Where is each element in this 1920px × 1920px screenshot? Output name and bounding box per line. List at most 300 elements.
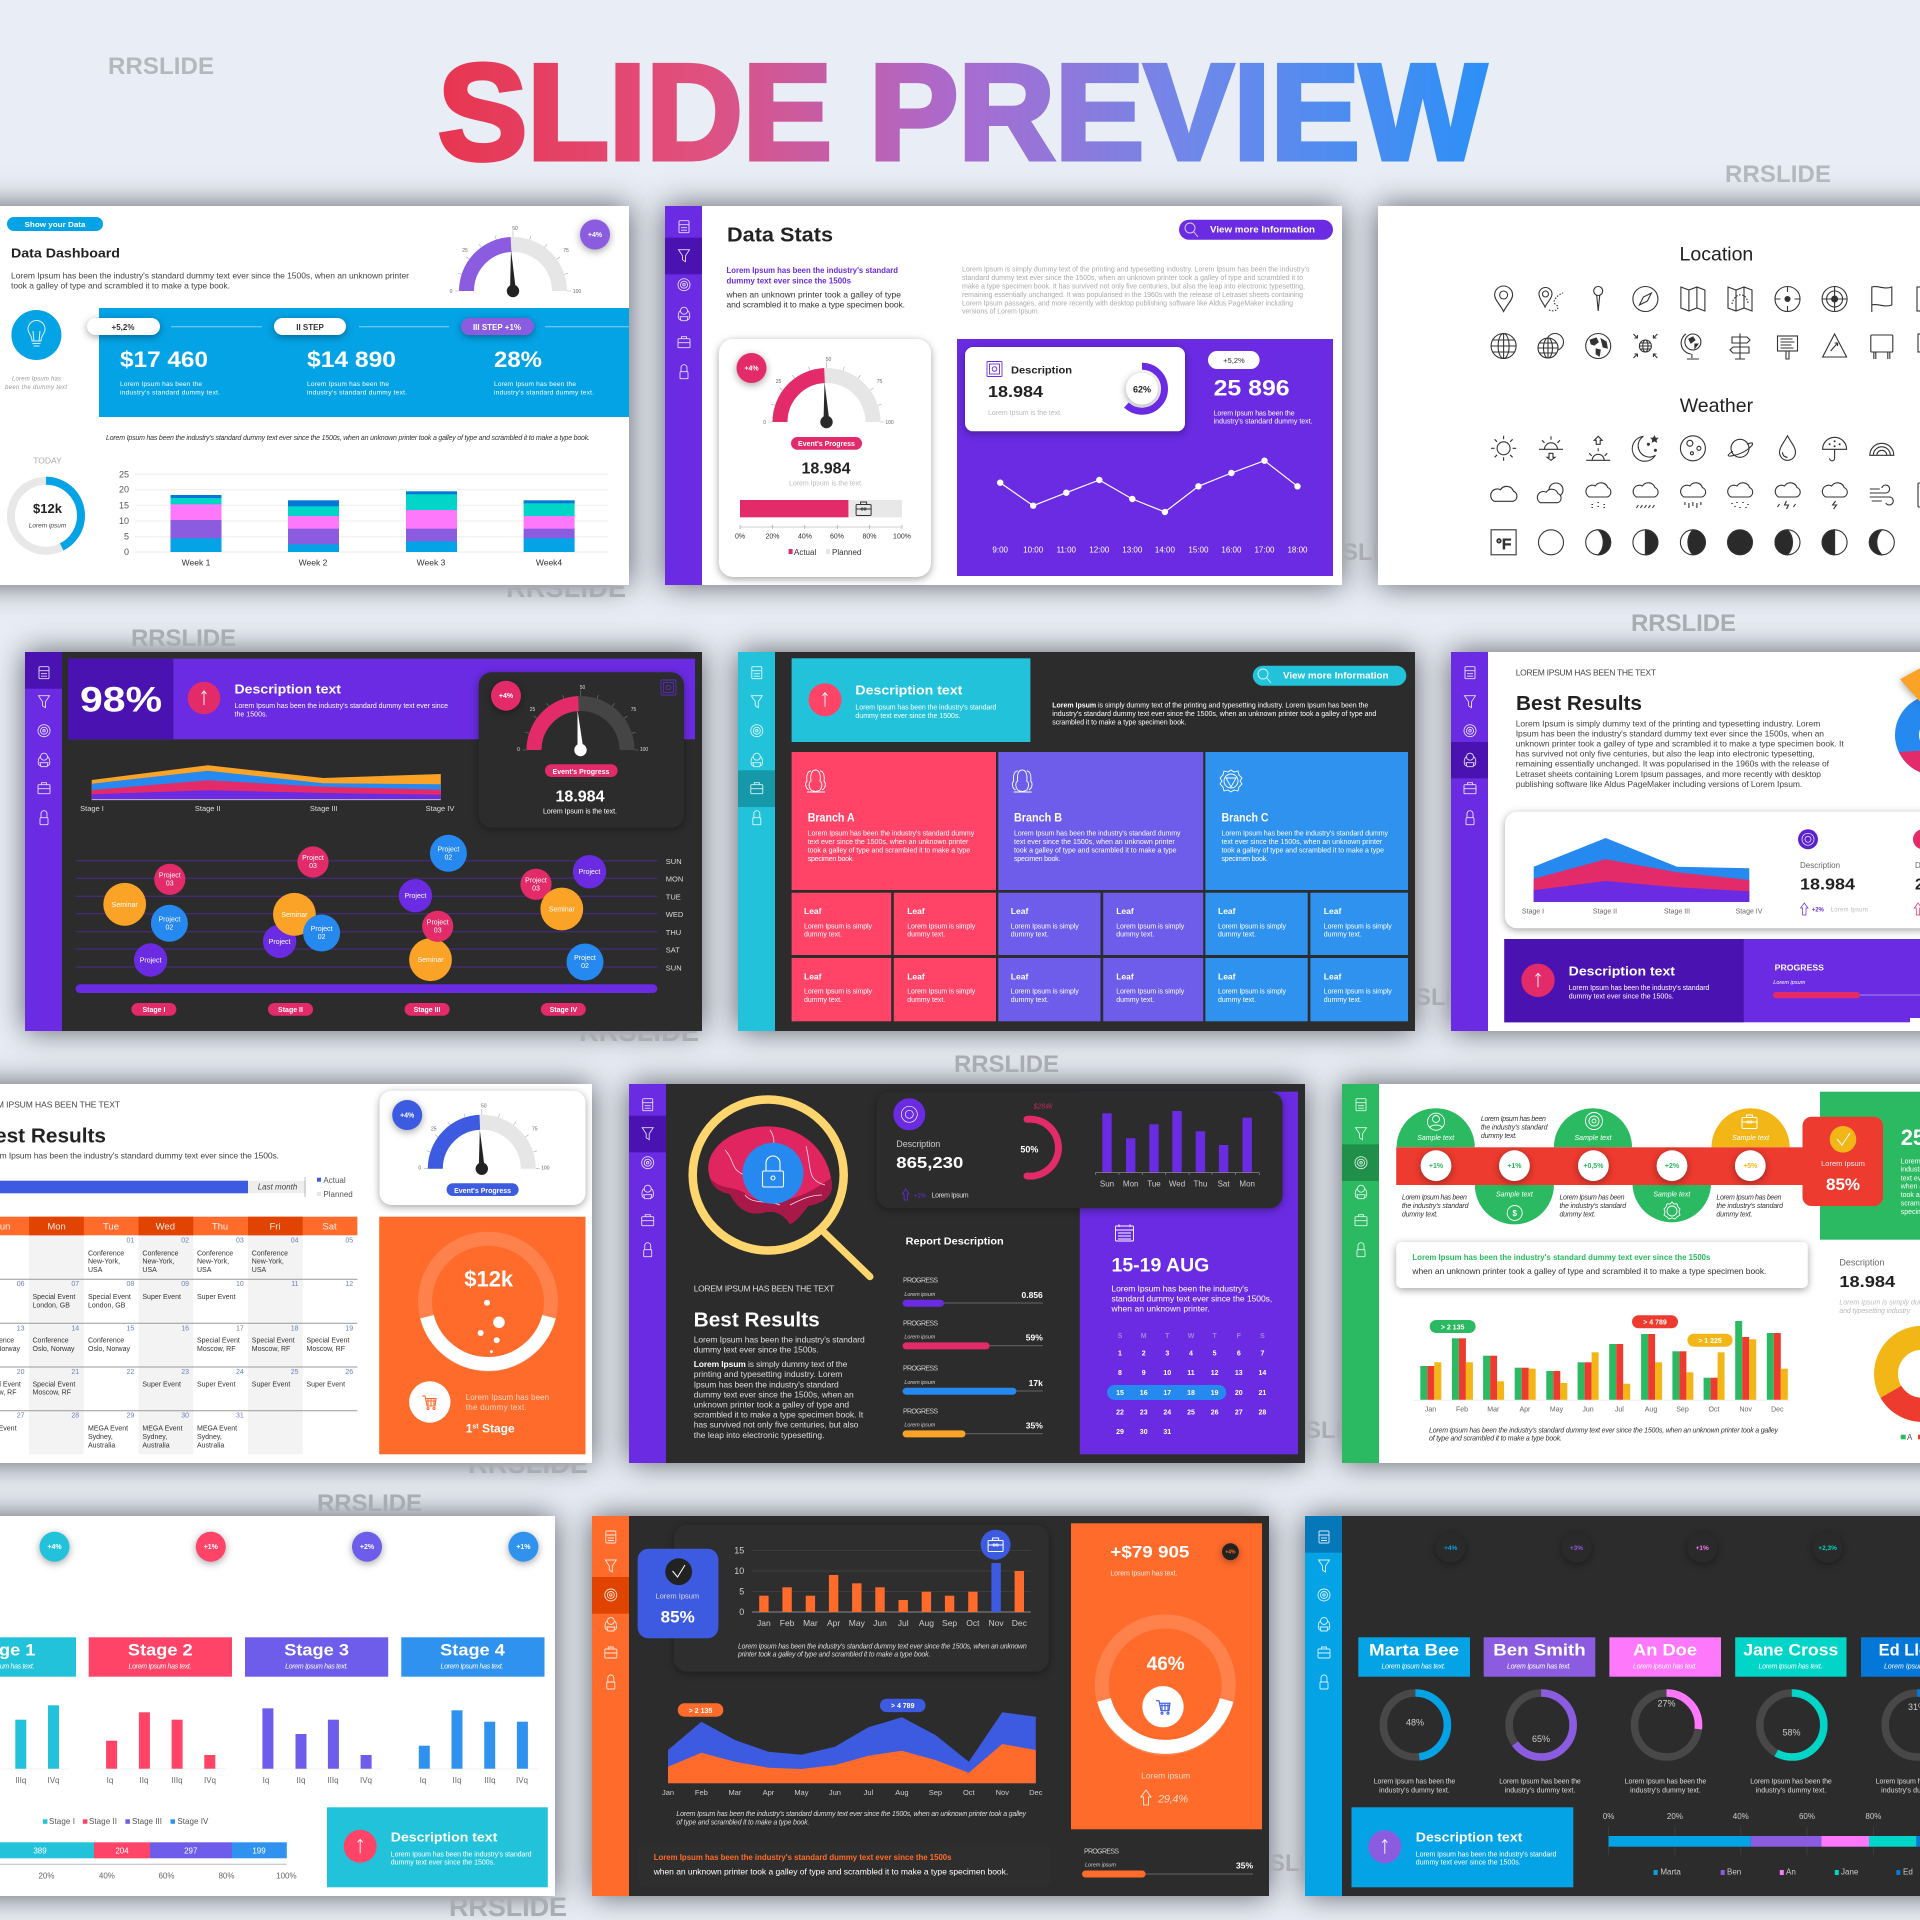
area chart: Stage II: [195, 804, 221, 813]
chart card: Stage III: [1664, 908, 1690, 915]
calendar: Sydney,: [197, 1434, 222, 1441]
quarterly bars: IVq: [360, 1776, 372, 1785]
gauge card: 100: [541, 1166, 550, 1172]
stacked bar: 20%: [38, 1872, 55, 1881]
calendar: Sat: [322, 1221, 337, 1232]
monthly bar chart: Apr: [1519, 1406, 1531, 1413]
stacked bar chart: Week4: [536, 557, 562, 567]
leaf blocks: Leaf: [1324, 906, 1341, 916]
sidebar: [592, 1516, 629, 1896]
date calendar: 22: [1116, 1409, 1124, 1416]
leaf blocks: Leaf: [1324, 971, 1341, 981]
progress bar: Planned: [323, 1190, 353, 1199]
report progress: 59%: [1026, 1333, 1043, 1343]
stage pills: [76, 984, 657, 1016]
line chart: 10:00: [1023, 545, 1044, 554]
weekly bars: Sat: [1218, 1180, 1230, 1189]
calendar: Super Event: [142, 1381, 181, 1388]
stage pills: Stage IV: [550, 1007, 578, 1014]
date calendar: 4: [1189, 1351, 1193, 1358]
header band: [68, 659, 695, 739]
bubble timeline: Project: [311, 926, 333, 933]
watermarks: SLIDE: [1415, 984, 1486, 1011]
watermarks: RRSLIDE: [579, 1017, 699, 1047]
process band: dummy text.: [1481, 1133, 1517, 1140]
gray paragraph: Lorem Ipsum is simply dummy text of the printing and typesetting industry. Lorem Ipsum has been the industry's: [962, 267, 1310, 274]
chart card: Stage IV: [1736, 908, 1763, 915]
gauge card: Event's Progress: [553, 769, 610, 776]
quarterly bars: Iq: [420, 1776, 426, 1785]
percent bubbles: +1%: [204, 1544, 219, 1551]
best results text: dummy text ever since the 1500s.: [694, 1345, 819, 1355]
stage headers: Stage 3: [284, 1641, 349, 1660]
paragraph: scrambled it to make a type specimen book.: [1052, 719, 1186, 726]
weekly bars: [1095, 1111, 1259, 1189]
calendar: Conference: [88, 1338, 124, 1345]
description card: 18.984: [988, 384, 1043, 401]
stage pills: Stage II: [278, 1007, 303, 1014]
legend: Stage I: [49, 1817, 75, 1826]
leaf blocks: Leaf: [907, 971, 925, 981]
top chart card: Jul: [898, 1618, 909, 1628]
gauge card: 0: [418, 1166, 421, 1172]
branch blocks: Branch C: [1222, 813, 1268, 825]
process band: dummy text.: [1716, 1211, 1752, 1218]
name headers: Lorem Ipsum has text.: [1758, 1663, 1823, 1670]
ring labels: 65%: [1532, 1734, 1550, 1744]
purple block: [877, 1092, 1298, 1454]
leaf blocks: dummy text.: [1116, 997, 1154, 1004]
watermarks: RRSLIDE: [317, 1490, 422, 1517]
process band: dummy text.: [1560, 1211, 1596, 1218]
calendar: Tue: [103, 1221, 119, 1232]
intro text: dummy text ever since the 1500s: [726, 275, 851, 285]
calendar: Super Event: [197, 1294, 236, 1301]
paragraph: has survived not only five centuries, but also the leap into electronic typesetting,: [1516, 748, 1815, 758]
best results text: scrambled it to make a type specimen book. It: [694, 1410, 864, 1420]
bottom text card: [638, 1843, 1051, 1887]
heading: Data Dashboard: [11, 246, 120, 261]
description band: dummy text ever since the 1500s.: [1569, 994, 1674, 1001]
area chart: > 2 135: [689, 1708, 712, 1715]
stacked bar chart: 40%: [1733, 1812, 1749, 1821]
blue metrics band: Lorem Ipsum has been the: [120, 381, 202, 388]
monthly bar chart: of type and scrambled it to make a type book.: [1429, 1436, 1562, 1443]
calendar: 05: [345, 1237, 353, 1244]
report progress: PROGRESS: [903, 1366, 938, 1373]
area chart: Jan: [662, 1788, 674, 1797]
calendar: 22: [127, 1369, 134, 1376]
quarterly bars: IIIq: [327, 1776, 339, 1785]
calendar: New-York,: [197, 1259, 229, 1266]
description band: [1504, 939, 1920, 1023]
eyebrow: LOREM IPSUM HAS BEEN THE TEXT: [1516, 668, 1656, 678]
area chart: > 4 789: [891, 1703, 915, 1710]
leaf blocks: dummy text.: [1011, 932, 1049, 939]
bubble timeline: Project: [302, 855, 324, 862]
bubble timeline: 03: [434, 927, 442, 934]
top chart card: Oct: [966, 1618, 980, 1628]
gauge card: Actual: [794, 548, 816, 557]
panel: green timeline: [1342, 1084, 1920, 1463]
process band: Lorem Ipsum has been: [1402, 1194, 1467, 1201]
metric card content: 865,230: [896, 1155, 963, 1172]
description band: Description text: [1569, 963, 1676, 978]
branch blocks: Lorem Ipsum has been the industry's standard dummy: [1222, 831, 1388, 838]
blue score card: Lorem Ipsum: [655, 1591, 699, 1600]
bubble timeline: [76, 835, 684, 981]
sidebar: [1305, 1516, 1342, 1896]
pill: show your data: Show your Data: [24, 220, 86, 229]
leaf blocks: Lorem Ipsum is simply: [1324, 923, 1392, 930]
calendar: 14: [71, 1325, 79, 1332]
process band: +1%: [1507, 1163, 1522, 1170]
report progress: PROGRESS: [903, 1321, 938, 1328]
gauge card: Event's Progress: [798, 441, 855, 448]
gauge card: 25: [431, 1127, 437, 1133]
paragraph: remaining essentially unchanged. It was popularised in the 1960s with the release of: [1516, 759, 1830, 769]
top chart card: Apr: [827, 1618, 840, 1628]
bulb caption: Lorem Ipsum has: [12, 377, 61, 383]
metric card content: Description: [896, 1139, 940, 1149]
orange card: Lorem Ipsum has text.: [1110, 1571, 1177, 1578]
stage headers: Stage 2: [128, 1641, 193, 1660]
stacked bar chart: 0%: [1603, 1812, 1614, 1821]
area chart: [80, 765, 454, 813]
progress: PROGRESS: [1084, 1848, 1119, 1855]
legend: Stage III: [132, 1817, 162, 1826]
date calendar: 7: [1260, 1351, 1264, 1358]
description and donut: Description: [1839, 1257, 1884, 1267]
calendar: New-York,: [142, 1259, 174, 1266]
description and donut: [1839, 1257, 1920, 1442]
ring captions: Lorem Ipsum has been the: [1750, 1779, 1832, 1786]
calendar: Wed: [156, 1221, 175, 1232]
date calendar: 2: [1142, 1351, 1146, 1358]
quarterly bars: IIq: [140, 1776, 148, 1785]
calendar: 08: [127, 1281, 134, 1288]
calendar: Super Event: [197, 1381, 236, 1388]
date calendar: 13: [1235, 1370, 1243, 1377]
leaf blocks: dummy text.: [1218, 997, 1256, 1004]
leaf blocks: Leaf: [1116, 906, 1134, 916]
paragraph: industry's standard dummy text ever since the 1500s, when an unknown printer took a galley of type and: [1052, 711, 1376, 718]
date calendar: T: [1165, 1333, 1170, 1340]
location icons: [1491, 286, 1920, 359]
calendar: London, GB: [32, 1302, 70, 1309]
bubble timeline: MON: [666, 875, 683, 884]
percent bubbles: +1%: [516, 1544, 531, 1551]
gauge card: 50: [826, 357, 831, 363]
description box: Lorem Ipsum has been the industry's standard: [1416, 1851, 1556, 1858]
branch blocks: specimen book.: [808, 856, 854, 863]
stacked bar chart: 10: [119, 516, 129, 526]
bubble timeline: 02: [581, 963, 589, 970]
area chart: Lorem Ipsum has been the industry's standard dummy text ever since the 1500s, when an unknown printer took a galley: [676, 1811, 1026, 1818]
description band: PROGRESS: [1775, 964, 1825, 973]
stacked bar chart: 15: [119, 500, 129, 510]
leaf blocks: [792, 893, 1408, 1021]
panel: dark timeline: [25, 652, 702, 1031]
description band: Lorem ipsum: [1773, 980, 1806, 986]
intro text: and scrambled it to make a type specimen book.: [726, 299, 905, 309]
gauge card: 75: [631, 707, 636, 713]
gray paragraph: standard dummy text ever since the 1500s, when an unknown printer took a galley of type and scrambled it to: [962, 275, 1303, 282]
leaf blocks: Leaf: [1011, 971, 1028, 981]
quarterly bars: Iq: [263, 1776, 269, 1785]
best results text: dummy text ever since the 1500s, when an: [694, 1389, 854, 1399]
best results text: unknown printer took a galley of type and: [694, 1399, 849, 1409]
heading: weather: Weather: [1680, 395, 1754, 417]
leaf blocks: dummy text.: [804, 997, 842, 1004]
bubble timeline: SUN: [666, 963, 682, 972]
gauge card: [719, 339, 931, 577]
line chart: 12:00: [1089, 545, 1110, 554]
date calendar: 5: [1213, 1351, 1217, 1358]
panel: team dark: [1305, 1516, 1920, 1896]
blue score card: [638, 1549, 718, 1638]
watermarks: RRSLIDE: [1725, 161, 1831, 188]
description box: dummy text ever since the 1500s.: [1416, 1860, 1521, 1867]
bubble timeline: Project: [427, 919, 449, 926]
stacked bar chart: Ben: [1727, 1868, 1741, 1877]
stacked bar chart: 5: [124, 532, 129, 542]
calendar: 31: [236, 1413, 244, 1420]
button: [1179, 220, 1333, 240]
gauge card: 75: [532, 1127, 538, 1133]
process band: +0,5%: [1583, 1163, 1604, 1170]
calendar: Super Event: [142, 1294, 181, 1301]
branch blocks: Branch A: [808, 813, 855, 825]
process band: dummy text.: [1402, 1211, 1438, 1218]
metric card content: Lorem Ipsum: [932, 1193, 969, 1200]
calendar: 10: [236, 1281, 244, 1288]
calendar: MEGA Event: [197, 1426, 237, 1433]
leaf blocks: Lorem Ipsum is simply: [907, 989, 976, 996]
metric card content: 50%: [1020, 1144, 1038, 1154]
leaf blocks: Lorem Ipsum is simply: [1011, 923, 1079, 930]
ring labels: 27%: [1657, 1698, 1676, 1708]
best results text: Ipsum has been the industry's standard: [694, 1379, 839, 1389]
area chart: Stage III: [310, 804, 338, 813]
name headers: Lorem Ipsum has text.: [1633, 1663, 1697, 1670]
intro text: took a galley of type and scrambled it to make a type book.: [11, 281, 230, 291]
top chart card: Aug: [919, 1618, 934, 1628]
date calendar: 15: [1116, 1390, 1124, 1397]
process band: Lorem Ipsum has been: [1716, 1194, 1781, 1201]
chart card: Lorem Ipsum: [1831, 908, 1868, 914]
stacked bar chart: 0: [124, 547, 129, 557]
branch blocks: text ever since the 1500s, when an unknown printer: [1014, 839, 1175, 846]
area chart: [662, 1699, 1043, 1826]
report progress: [903, 1237, 1043, 1437]
description box: [1352, 1807, 1573, 1887]
title: SLIDE PREVIEW: [438, 36, 1487, 188]
area chart: Mar: [728, 1788, 742, 1797]
ring captions: industry's dummy text.: [1756, 1787, 1826, 1794]
report progress: 0.856: [1022, 1290, 1043, 1300]
monthly bar chart: Jul: [1615, 1406, 1624, 1413]
weekly bars: Thu: [1194, 1180, 1207, 1189]
description card: Description: [1011, 366, 1072, 377]
branch blocks: took a galley of type and scrambled it to make a type: [1014, 848, 1177, 855]
leaf blocks: Lorem Ipsum is simply: [1218, 923, 1286, 930]
orange card: +4%: [1225, 1550, 1236, 1556]
bubble timeline: 03: [309, 863, 317, 870]
report progress: Lorem ipsum: [904, 1380, 936, 1386]
description and donut: and typesetting industry.: [1839, 1308, 1911, 1315]
quarterly bars: IIq: [453, 1776, 461, 1785]
blue metrics band: industry's standard dummy text.: [494, 390, 594, 397]
leaf blocks: Lorem Ipsum is simply: [1218, 989, 1286, 996]
calendar: MEGA Event: [88, 1426, 128, 1433]
gauge card: +4%: [744, 366, 759, 372]
calendar: Special Event: [32, 1294, 75, 1301]
gauge: 0: [450, 289, 453, 295]
bubble timeline: Project: [405, 893, 426, 900]
calendar: Moscow, RF: [197, 1346, 236, 1353]
branch blocks: Lorem Ipsum has been the industry's standard dummy: [808, 831, 975, 838]
branch blocks: Lorem Ipsum has been the industry's standard dummy: [1014, 831, 1181, 838]
calendar: 04: [291, 1237, 299, 1244]
calendar: 23: [181, 1369, 189, 1376]
report progress: Report Description: [906, 1237, 1004, 1248]
stage headers: Stage 4: [440, 1641, 505, 1660]
panel: icon sheet: [1378, 206, 1920, 585]
intro text: when an unknown printer took a galley of type: [726, 289, 901, 299]
calendar: Conference: [142, 1250, 179, 1257]
stage headers: Lorem Ipsum has text.: [440, 1663, 504, 1670]
metric card content: $284k: [1032, 1103, 1053, 1110]
gray paragraph: make a type specimen book. It has survived not only five centuries, but also the leap into electronic typesetting,: [962, 284, 1305, 291]
progress bar: [0, 1176, 353, 1199]
report progress: 17k: [1029, 1378, 1043, 1388]
line chart: 13:00: [1122, 545, 1143, 554]
orange card: Lorem ipsum: [1141, 1771, 1190, 1781]
ring captions: [1374, 1779, 1920, 1794]
top chart card: Jan: [757, 1618, 771, 1628]
calendar: 21: [71, 1369, 79, 1376]
top chart card: Feb: [780, 1618, 795, 1628]
leaf blocks: Leaf: [1011, 906, 1028, 916]
monthly bar chart: Lorem Ipsum has been the industry's standard dummy text ever since the 1500s, when an unknown printer took a galley: [1429, 1427, 1778, 1434]
chart card: Stage II: [1593, 908, 1617, 915]
paragraph: publishing software like Aldus PageMaker including versions of Lorem Ipsum.: [1516, 779, 1802, 789]
orange card: Lorem Ipsum has been: [466, 1393, 549, 1402]
paragraph: [1516, 718, 1844, 789]
gauge card: Lorem Ipsum is the text.: [543, 808, 617, 815]
calendar: 06: [17, 1281, 25, 1288]
calendar: London, GB: [88, 1302, 126, 1309]
gauge card: Event's Progress: [454, 1188, 511, 1195]
calendar: Moscow, RF: [306, 1346, 345, 1353]
date calendar: 28: [1259, 1409, 1266, 1416]
process band: the industry's standard: [1716, 1203, 1784, 1210]
top chart card: Mar: [803, 1618, 818, 1628]
date calendar: 21: [1259, 1390, 1266, 1397]
date calendar: 19: [1211, 1390, 1219, 1397]
gauge card: 100%: [893, 533, 911, 540]
name headers: Jane Cross: [1743, 1642, 1838, 1660]
gauge card: 60%: [830, 533, 844, 540]
panel: stages: [0, 1516, 555, 1896]
top chart card: 5: [739, 1587, 744, 1597]
leaf blocks: Leaf: [1218, 906, 1236, 916]
date calendar: 18: [1187, 1390, 1195, 1397]
watermarks: RRSLIDE: [131, 625, 236, 652]
gauge card: 0%: [735, 533, 745, 540]
branch blocks: specimen book.: [1014, 856, 1060, 863]
leaf blocks: Leaf: [1218, 971, 1236, 981]
red score card: [1802, 1117, 1883, 1206]
calendar: 03: [236, 1237, 244, 1244]
progress rings: [1383, 1693, 1920, 1757]
weekly bars: Sun: [1100, 1180, 1114, 1189]
bubble timeline: Seminar: [549, 906, 575, 914]
date calendar: 23: [1140, 1409, 1148, 1416]
progress: Lorem ipsum: [1085, 1862, 1116, 1868]
sidebar: [1342, 1084, 1379, 1463]
gauge card: [479, 672, 684, 828]
paragraph: Letraset sheets containing Lorem Ipsum passages, and more recently with desktop: [1516, 769, 1821, 779]
description card: Lorem Ipsum is the text.: [988, 410, 1062, 417]
calendar: MEGA Event: [142, 1426, 183, 1433]
intro text: [11, 271, 409, 291]
calendar: Fri: [269, 1221, 281, 1232]
paragraph: Lorem Ipsum is simply dummy text of the printing and typesetting industry. Lorem: [1516, 718, 1820, 728]
description box: dummy text ever since the 1500s.: [855, 713, 960, 720]
leaf blocks: Lorem Ipsum is simply: [1324, 989, 1392, 996]
bubble timeline: SAT: [666, 945, 680, 954]
gauge card: Lorem Ipsum is the text.: [789, 481, 863, 488]
stacked bar chart: Week 1: [182, 557, 211, 567]
area chart: Stage IV: [426, 804, 454, 813]
calendar: USA: [197, 1267, 212, 1274]
header band: the 1500s.: [234, 711, 268, 718]
leaf blocks: dummy text.: [1011, 997, 1049, 1004]
description and donut: A: [1907, 1433, 1913, 1442]
stacked bar: 60%: [158, 1872, 175, 1881]
stacked bar chart: Week 3: [417, 557, 446, 567]
orange card: [379, 1217, 586, 1454]
orange card: [1071, 1523, 1262, 1829]
button: [1253, 666, 1406, 686]
chart card: +2%: [1812, 908, 1825, 914]
description box: Description text: [1416, 1829, 1523, 1844]
area chart: May: [794, 1788, 809, 1797]
stacked bar: 297: [184, 1846, 198, 1855]
top chart card: [674, 1525, 1049, 1672]
orange card: $12k: [464, 1267, 514, 1292]
process band: the industry's standard: [1560, 1203, 1627, 1210]
calendar: Special Event: [32, 1381, 75, 1388]
calendar: 24: [236, 1369, 244, 1376]
metric card content: +1%: [914, 1194, 926, 1200]
calendar: 25: [291, 1369, 299, 1376]
gauge card: 100: [640, 747, 648, 753]
intro text: Lorem Ipsum has been the industry's standard dummy text ever since the 1500s, when an unknown printer: [11, 271, 409, 281]
calendar: Australia: [142, 1442, 170, 1449]
red score card: Lorem Ipsum: [1821, 1159, 1865, 1168]
monthly bar chart: [1413, 1315, 1790, 1443]
leaf blocks: Leaf: [1116, 971, 1134, 981]
stage headers: Lorem Ipsum has text.: [128, 1663, 192, 1670]
gauge card: +4%: [400, 1112, 415, 1120]
calendar: 19: [345, 1325, 353, 1332]
monthly bar chart: Nov: [1739, 1406, 1752, 1413]
legend: Stage II: [89, 1817, 117, 1826]
blue metrics band: II STEP: [296, 323, 324, 332]
